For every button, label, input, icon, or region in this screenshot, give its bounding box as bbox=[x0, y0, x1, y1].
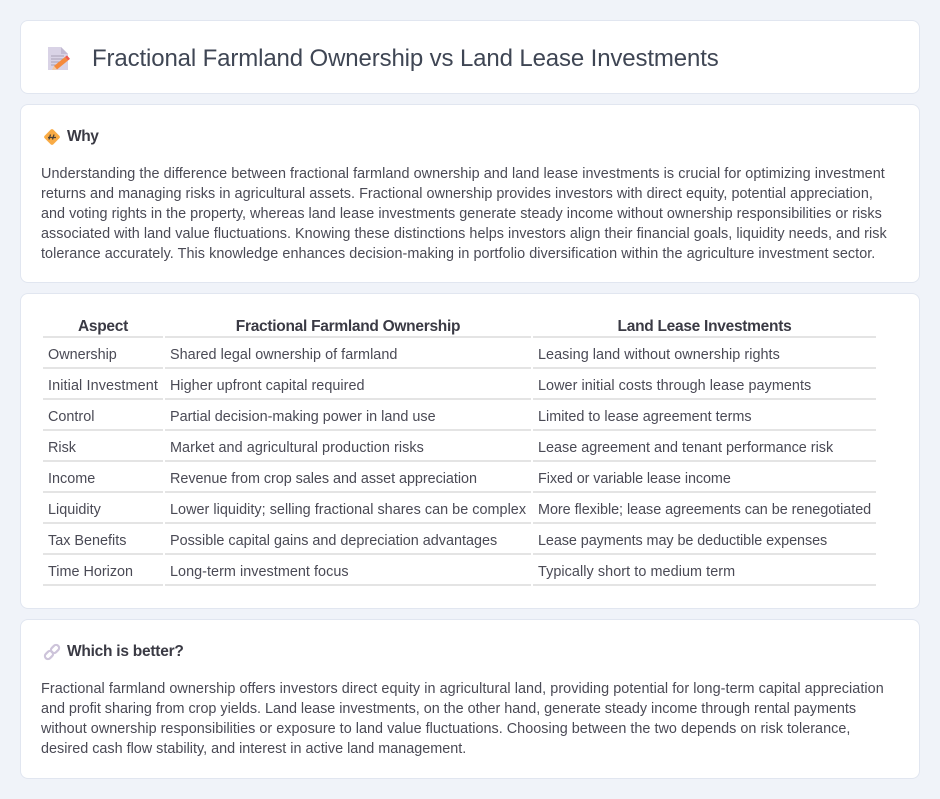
column header: fractional farmland ownership: Fractional Farmland Ownership bbox=[236, 318, 460, 335]
row: initial investment: Initial Investment bbox=[48, 378, 158, 394]
row: time horizon: Typically short to medium term bbox=[538, 564, 735, 580]
row: control: Control bbox=[48, 409, 94, 425]
text block: which is better: without ownership responsibilities or exposure to land value fluctuations. Choosing between the two depends on risk tolerance, bbox=[41, 721, 850, 737]
row: control: Limited to lease agreement terms bbox=[538, 409, 752, 425]
text block: why: tolerance accurately. This knowledge enhances decision-making in portfolio diversification within the agriculture investment sector. bbox=[41, 246, 875, 262]
icon: document with pencil bbox=[48, 47, 70, 70]
text block: which is better: and profit sharing from crop yields. Land lease investments, on the other hand, generate steady income through rental payments bbox=[41, 701, 856, 717]
panel: comparison table card bbox=[20, 293, 920, 609]
icon: chain link bbox=[44, 644, 60, 660]
row: income: Revenue from crop sales and asset appreciation bbox=[170, 471, 477, 487]
row: tax benefits: Lease payments may be deductible expenses bbox=[538, 533, 827, 549]
heading: why: Why bbox=[67, 128, 99, 145]
row: liquidity: Liquidity bbox=[48, 502, 101, 518]
text block: which is better: desired cash flow stability, and interest in active land management. bbox=[41, 741, 466, 757]
row: risk: Lease agreement and tenant performance risk bbox=[538, 440, 833, 456]
row: tax benefits: Possible capital gains and depreciation advantages bbox=[170, 533, 497, 549]
row: ownership: Shared legal ownership of farmland bbox=[170, 347, 397, 363]
text block: why: Understanding the difference between fractional farmland ownership and land lease investments is crucial for optimizing investment bbox=[41, 166, 885, 182]
row: initial investment: Higher upfront capital required bbox=[170, 378, 365, 394]
text block: why: associated with land value fluctuations. Knowing these distinctions helps investors align their financial goals, liquidity needs, and risk bbox=[41, 226, 887, 242]
row: ownership: Leasing land without ownership rights bbox=[538, 347, 780, 363]
row: tax benefits: Tax Benefits bbox=[48, 533, 126, 549]
panel: why bbox=[20, 104, 920, 283]
row: risk bbox=[48, 440, 834, 456]
text block: why bbox=[41, 166, 887, 262]
icon: diamond road sign bbox=[44, 129, 60, 145]
row: risk: Market and agricultural production risks bbox=[170, 440, 424, 456]
text block: which is better bbox=[41, 681, 884, 757]
row: time horizon: Time Horizon bbox=[48, 564, 133, 580]
panel: which is better bbox=[20, 619, 920, 779]
row: income: Income bbox=[48, 471, 95, 487]
row: tax benefits bbox=[48, 533, 827, 549]
panel: title card bbox=[20, 20, 920, 94]
text block: why: returns and managing risks in agricultural assets. Fractional ownership provides investors with direct equity, potential appreciation, bbox=[41, 186, 873, 202]
text block: why: and voting rights in the property, whereas land lease investments generate steady income without ownership responsibilities or risks bbox=[41, 206, 882, 222]
row: control bbox=[48, 409, 752, 425]
row: control: Partial decision-making power in land use bbox=[170, 409, 436, 425]
column header: aspect: Aspect bbox=[78, 318, 128, 335]
row: initial investment bbox=[48, 378, 811, 394]
row: risk: Risk bbox=[48, 440, 76, 456]
row: time horizon bbox=[48, 564, 735, 580]
row: liquidity: Lower liquidity; selling fractional shares can be complex bbox=[170, 502, 526, 518]
heading: which is better: Which is better? bbox=[67, 643, 184, 660]
row: ownership bbox=[48, 347, 780, 363]
row: income bbox=[48, 471, 731, 487]
row: liquidity: More flexible; lease agreements can be renegotiated bbox=[538, 502, 871, 518]
row: income: Fixed or variable lease income bbox=[538, 471, 731, 487]
comparison table bbox=[43, 318, 876, 586]
row: ownership: Ownership bbox=[48, 347, 117, 363]
text block: which is better: Fractional farmland ownership offers investors direct equity in agricultural land, providing potential for long-term capital appreciation bbox=[41, 681, 884, 697]
title: Fractional Farmland Ownership vs Land Lease Investments bbox=[92, 45, 719, 72]
row: initial investment: Lower initial costs through lease payments bbox=[538, 378, 811, 394]
row: time horizon: Long-term investment focus bbox=[170, 564, 349, 580]
row: liquidity bbox=[48, 502, 871, 518]
column header: land lease investments: Land Lease Investments bbox=[618, 318, 791, 335]
